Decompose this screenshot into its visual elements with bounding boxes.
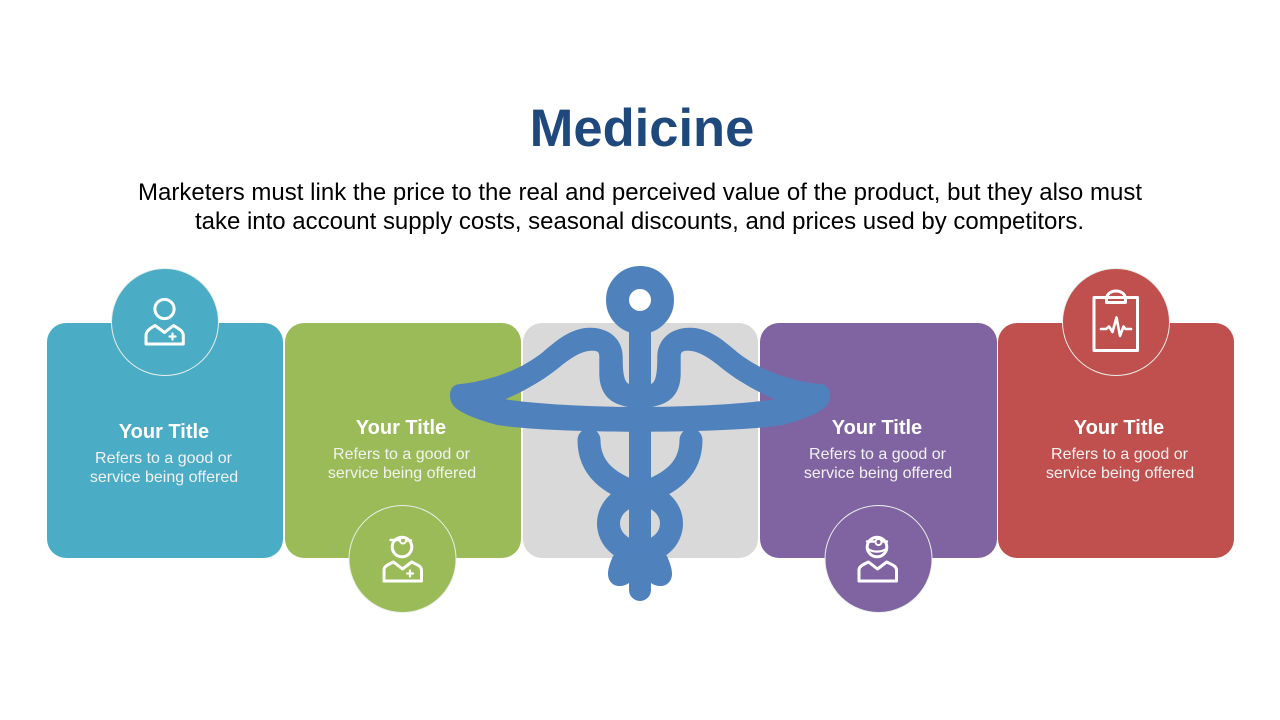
icon: clipboard badge — [1062, 268, 1170, 376]
staff — [629, 318, 651, 601]
panel: green card — [285, 323, 521, 558]
card 2 text: Refers to a good or — [333, 446, 471, 463]
card 1 title: Your Title — [119, 421, 209, 443]
wings — [450, 328, 830, 432]
panel: grey centre card — [523, 323, 758, 558]
card 5 text: Refers to a good or — [1051, 446, 1189, 463]
panel: purple card — [760, 323, 997, 558]
intro text — [138, 179, 1142, 235]
card 2 text: service being offered — [328, 465, 476, 482]
icon: doctor badge — [349, 506, 456, 612]
card 5 title: Your Title — [1074, 417, 1164, 439]
card 1 text: service being offered — [90, 469, 238, 486]
panel: red card — [998, 323, 1234, 558]
card 4 text — [804, 446, 952, 482]
card 2 text — [328, 446, 476, 482]
intro text: take into account supply costs, seasonal discounts, and prices used by competitors. — [195, 208, 1084, 235]
card 4 text: Refers to a good or — [809, 446, 947, 463]
card 5 text: service being offered — [1046, 465, 1194, 482]
snake tail — [608, 545, 672, 586]
snake — [589, 440, 691, 552]
icon: caduceus — [450, 278, 830, 601]
icon: person badge — [112, 268, 218, 376]
card 1 text — [90, 450, 238, 486]
card 1 text: Refers to a good or — [95, 450, 233, 467]
title: Medicine — [530, 99, 754, 158]
card 4 text: service being offered — [804, 465, 952, 482]
card 4 title: Your Title — [832, 417, 922, 439]
panel: teal card — [47, 323, 283, 558]
card 2 title: Your Title — [356, 417, 446, 439]
icon: surgeon badge — [825, 506, 932, 612]
intro text: Marketers must link the price to the real and perceived value of the product, but they also must — [138, 179, 1142, 206]
staff top ring — [618, 278, 662, 322]
card 5 text — [1046, 446, 1194, 482]
